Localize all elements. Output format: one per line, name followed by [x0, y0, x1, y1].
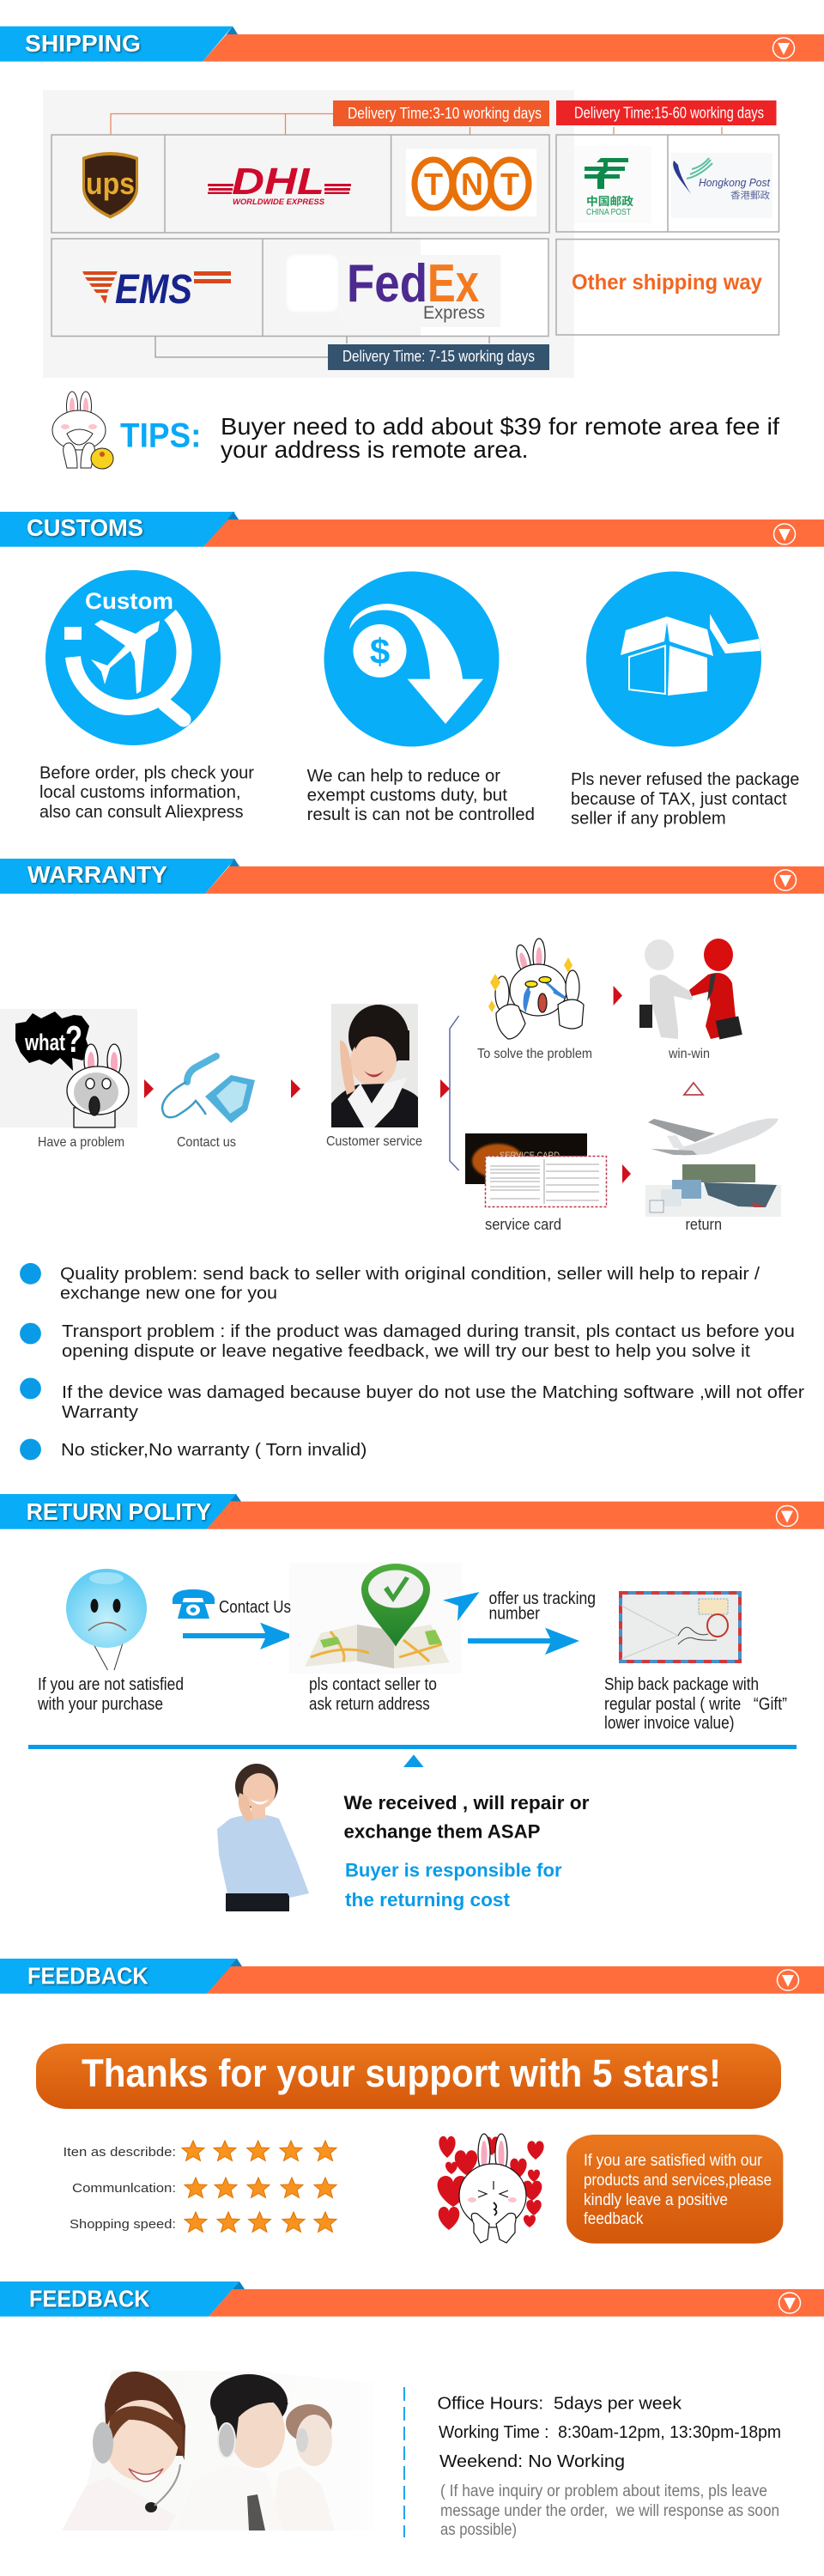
header: warranty [0, 859, 824, 894]
rating row: shopping speed: Shopping speed: [70, 2217, 176, 2232]
header: feedback: FEEDBACK [27, 1963, 148, 1990]
text: office hours: Office Hours: 5days per week [438, 2394, 682, 2414]
logo: DHL: WORLDWIDE EXPRESS [233, 197, 325, 207]
photo: support team [62, 2370, 373, 2530]
logo: China Post [574, 146, 651, 223]
tips: rabbit mascot [52, 392, 113, 469]
logo: TNT [406, 149, 536, 216]
icon: sad balloon [66, 1569, 147, 1670]
rating row: item as described [64, 2141, 336, 2160]
caption: not satisfied: If you are not satisfied [38, 1675, 184, 1694]
tips: text [221, 413, 779, 463]
logo: DHL [208, 161, 351, 207]
arrow [183, 1623, 294, 1649]
logo: TNT: T [424, 167, 443, 202]
arrow: triangle pointer [443, 1592, 479, 1621]
illustration: crying rabbit thumbs up [488, 939, 584, 1039]
label: contact us: Contact us [177, 1135, 236, 1150]
speech burst [15, 1012, 90, 1071]
logo: Hongkong Post: Hongkong Post [699, 177, 771, 189]
caption [307, 767, 535, 824]
caption: Before order, pls check your [39, 764, 254, 783]
warranty note 3 [20, 1378, 804, 1422]
logo: Hongkong Post [671, 153, 772, 218]
illustration: service card [465, 1133, 606, 1207]
illustration: map with location pin [289, 1563, 462, 1674]
caption: contact seller: pls contact seller to [309, 1675, 437, 1694]
text: inquiry note: ( If have inquiry or problem about items, pls leave [440, 2482, 767, 2500]
rating row: shopping speed [70, 2212, 336, 2233]
illustration: rabbit with hearts [438, 2134, 544, 2243]
caption [571, 770, 799, 828]
label: customer service: Customer service [326, 1134, 422, 1149]
logo: FedEx Express [287, 254, 500, 327]
illustration: handshake figures [639, 939, 742, 1039]
warranty note 2: Transport problem : if the product was damaged during transit, pls contact us before you [62, 1322, 795, 1341]
header: customs: CUSTOMS [27, 514, 143, 541]
warranty note 1: Quality problem: send back to seller with original condition, seller will help to repair / [60, 1265, 760, 1284]
icon: dollar with down arrow [324, 572, 500, 747]
text: office hours: Weekend: No Working [439, 2451, 625, 2471]
carrier grid [52, 135, 779, 337]
agent front [62, 2372, 185, 2530]
panel: customs column 2 [307, 572, 535, 824]
warranty note 3: Warranty [62, 1403, 138, 1422]
caption: ship back package: Ship back package with [604, 1675, 759, 1694]
delivery time badge: 15-60 days: Delivery Time:15-60 working days [574, 103, 764, 122]
label: offer tracking number: offer us tracking [489, 1589, 596, 1608]
icon: open package [586, 572, 761, 747]
warranty note 2 [20, 1322, 795, 1361]
caption: ship back package: lower invoice value) [604, 1714, 735, 1733]
delivery time badge: 7-15 days: Delivery Time: 7-15 working days [342, 347, 535, 365]
photo: customer service agent [331, 1004, 418, 1127]
text: office hours: Working Time : 8:30am-12pm, 13:30pm-18pm [439, 2422, 781, 2442]
tips: heading: TIPS: [120, 417, 201, 455]
tips: text: Buyer need to add about $39 for remote area fee if [221, 413, 779, 440]
icon: airmail envelope [621, 1593, 740, 1662]
label: service card: service card [485, 1216, 561, 1233]
delivery time badge: 3-10 days: Delivery Time:3-10 working days [348, 104, 542, 122]
rabbit [67, 1044, 129, 1127]
speech burst: ? [65, 1018, 82, 1060]
label: return: return [685, 1216, 722, 1233]
icon: dollar with down arrow: $ [370, 631, 390, 671]
text: buyer responsible [345, 1860, 562, 1911]
label: other shipping way: Other shipping way [572, 270, 762, 295]
text: inquiry note: message under the order, we will response as soon [440, 2502, 779, 2520]
text: buyer responsible: Buyer is responsible for [345, 1860, 562, 1881]
logo: DHL: DHL [232, 161, 324, 203]
logo: UPS: ups [86, 166, 135, 201]
header: return polity [0, 1494, 824, 1529]
connector lines: express delivery group [111, 113, 470, 135]
warranty note 1 [20, 1263, 760, 1303]
panel: shipping carriers [43, 90, 779, 378]
text: we received [343, 1792, 590, 1843]
caption: ship back package [604, 1675, 787, 1733]
text: inquiry note: as possible) [440, 2521, 517, 2539]
arrow [614, 986, 622, 1005]
text: we received: exchange them ASAP [343, 1821, 541, 1843]
caption: We can help to reduce or [307, 767, 500, 786]
warranty note 3: If the device was damaged because buyer do not use the Matching software ,will not offer [62, 1383, 804, 1402]
photo: support woman [217, 1764, 309, 1911]
rating row: communication: Communlcation: [72, 2181, 176, 2196]
header: feedback (contact) [0, 2281, 824, 2317]
speech burst: what [24, 1030, 65, 1055]
arrow up [403, 1754, 424, 1767]
callout: leave positive feedback: If you are satisfied with our [584, 2151, 762, 2170]
delivery time badge: 3-10 days [333, 100, 549, 126]
dashed divider [403, 2387, 405, 2537]
icon: blue telephone [173, 1589, 215, 1619]
arrow [144, 1079, 154, 1098]
arrow [622, 1164, 631, 1183]
arrow [291, 1079, 300, 1098]
arrow outline [684, 1083, 703, 1095]
caption: contact seller [309, 1675, 437, 1714]
label: offer tracking number: number [489, 1604, 540, 1623]
logo: FedEx Express: Express [423, 303, 485, 323]
illustration: service card: SERVICE CARD [500, 1151, 560, 1161]
caption: Pls never refused the package [571, 770, 799, 789]
agent far right [270, 2404, 335, 2530]
warranty note 1: exchange new one for you [60, 1285, 277, 1303]
caption [39, 764, 254, 822]
caption: local customs information, [39, 783, 240, 802]
logo: TNT: N [461, 167, 483, 202]
caption: result is can not be controlled [307, 805, 535, 824]
text: we received: We received , will repair or [343, 1792, 590, 1814]
agent middle [176, 2374, 288, 2530]
logo: FedEx Express: Fed [347, 254, 427, 313]
caption: contact seller: ask return address [309, 1695, 430, 1714]
header: warranty: WARRANTY [27, 861, 167, 888]
header: customs [0, 512, 824, 547]
caption: also can consult Aliexpress [39, 803, 244, 822]
logo: EMS [82, 267, 231, 313]
warranty note 4: No sticker,No warranty ( Torn invalid) [61, 1441, 367, 1460]
header: shipping: SHIPPING [25, 30, 141, 57]
header: feedback [0, 1959, 824, 1994]
icon: telephone [162, 1056, 255, 1123]
text: buyer responsible: the returning cost [345, 1889, 511, 1911]
label: contact us: Contact Us [219, 1598, 291, 1617]
caption: not satisfied: with your purchase [37, 1695, 163, 1714]
icon: custom magnifier and plane [45, 570, 221, 745]
caption: exempt customs duty, but [307, 787, 507, 805]
logo: China Post: CHINA POST [586, 208, 631, 217]
icon: custom magnifier and plane: Custom [85, 588, 173, 614]
callout: leave positive feedback: kindly leave a positive [584, 2190, 728, 2209]
header: shipping [0, 27, 824, 62]
delivery time badge: 7-15 days [328, 344, 549, 370]
tips: text: your address is remote area. [221, 436, 529, 463]
callout: leave positive feedback [566, 2135, 783, 2244]
caption: seller if any problem [571, 809, 726, 828]
logo: EMS: EMS [115, 267, 192, 313]
logo: TNT: T [500, 167, 519, 202]
illustration: plane and cargo ship [645, 1118, 781, 1217]
arrow [440, 1079, 450, 1098]
banner: thanks for your support [36, 2044, 781, 2109]
arrow [468, 1628, 579, 1655]
caption: because of TAX, just contact [571, 790, 787, 809]
rating row: item as described: Iten as describde: [64, 2145, 176, 2160]
text: office hours [438, 2394, 781, 2471]
banner: thanks for your support: Thanks for your support with 5 stars! [82, 2051, 721, 2095]
caption: not satisfied [37, 1675, 184, 1714]
bracket [450, 1016, 459, 1170]
divider bar [28, 1745, 797, 1749]
logo: China Post: 中国邮政 [586, 195, 633, 208]
panel: customs column 1 [39, 570, 254, 822]
delivery time badge: 15-60 days [556, 100, 776, 125]
logo: Hongkong Post: 香港郵政 [730, 189, 770, 201]
rating row: communication [72, 2178, 336, 2198]
logo: UPS [82, 152, 138, 218]
callout: leave positive feedback: products and services,please [584, 2171, 772, 2190]
callout: leave positive feedback: feedback [584, 2209, 644, 2228]
warranty note 2: opening dispute or leave negative feedback, we will try our best to help you solve it [62, 1342, 750, 1361]
label: have a problem: Have a problem [38, 1135, 124, 1150]
logo: FedEx Express: Ex [427, 254, 479, 313]
label: offer tracking number [489, 1589, 596, 1623]
panel: customs column 3 [571, 572, 799, 828]
label: win-win: win-win [668, 1047, 710, 1061]
header: return polity: RETURN POLITY [27, 1498, 211, 1525]
header: feedback (contact): FEEDBACK [29, 2286, 149, 2312]
text: inquiry note [440, 2482, 779, 2539]
warranty flow: have a problem [0, 1009, 137, 1127]
caption: ship back package: regular postal ( write “Gift” [604, 1695, 787, 1714]
label: to solve the problem: To solve the problem [477, 1047, 592, 1061]
